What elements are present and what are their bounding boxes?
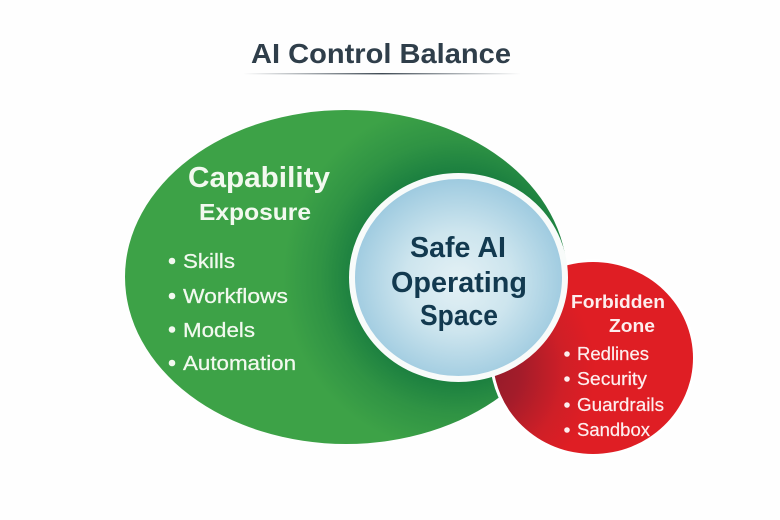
list: capabilities: [169, 251, 296, 375]
list: capabilities: Models: [183, 320, 255, 342]
label: safe AI: Safe AI: [410, 232, 506, 264]
green ellipse: [125, 110, 567, 444]
list: forbidden items: Sandbox: [577, 420, 650, 440]
list: forbidden items: Security: [577, 369, 647, 389]
list: capabilities: Automation: [183, 353, 296, 375]
label: operating: Operating: [391, 267, 527, 299]
heading: capability: Capability: [188, 162, 330, 194]
red circle: [493, 262, 693, 454]
title underline: [243, 73, 521, 74]
list: forbidden items: Guardrails: [577, 395, 664, 415]
list: capabilities: Skills: [183, 251, 235, 273]
blue circle: [352, 176, 565, 379]
label: space: Space: [420, 300, 498, 332]
list: forbidden items: Redlines: [577, 344, 649, 364]
list: forbidden items: [564, 344, 664, 440]
white rim behind red circle: [490, 259, 696, 457]
heading: zone: Zone: [609, 315, 655, 336]
panel: forbidden zone: [490, 259, 696, 457]
subheading: exposure: Exposure: [199, 199, 311, 225]
title: AI Control Balance: [251, 38, 511, 69]
panel: safe AI operating space: [352, 176, 565, 379]
list: capabilities: Workflows: [183, 286, 288, 308]
heading: forbidden: Forbidden: [571, 291, 665, 312]
panel: capability exposure: [125, 110, 567, 444]
